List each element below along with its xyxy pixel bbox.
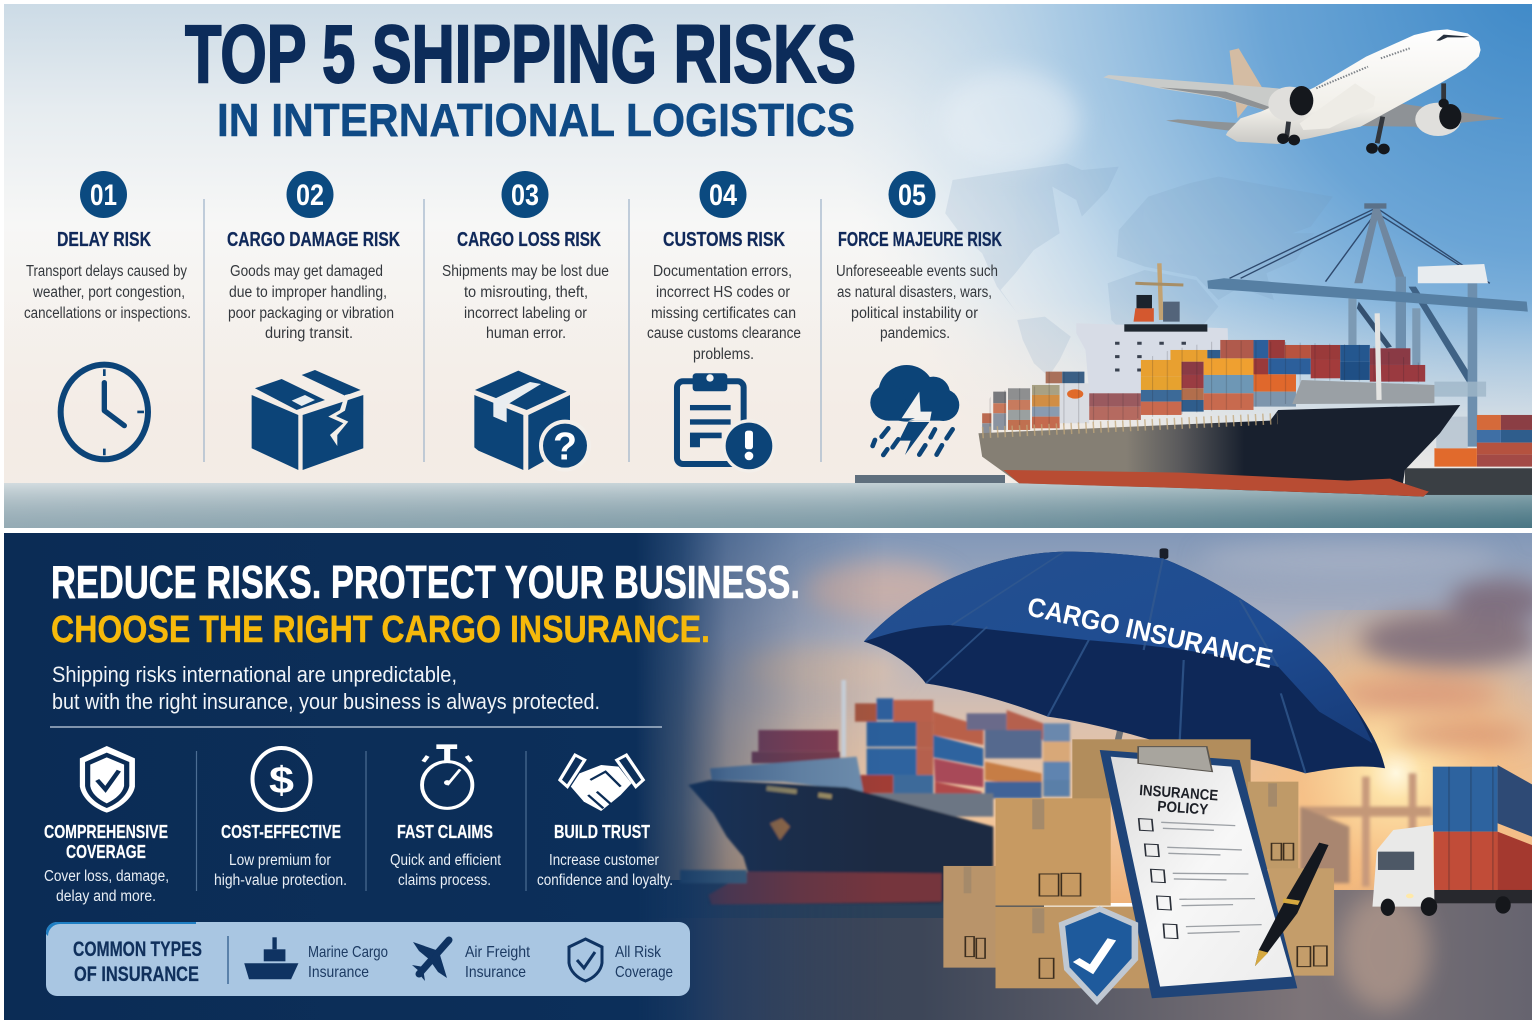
description: build trust: Increase customer — [549, 852, 659, 869]
heading: cargo damage risk: CARGO DAMAGE RISK — [227, 229, 400, 251]
description: fast claims — [390, 852, 502, 889]
heading: comprehensive coverage: COMPREHENSIVE — [44, 822, 168, 842]
truck with containers — [1372, 765, 1536, 916]
bar heading: OF INSURANCE — [74, 963, 199, 986]
description: customs risk — [647, 263, 801, 363]
headline — [51, 556, 800, 651]
item: air freight insurance — [412, 940, 530, 981]
description: customs risk: missing certificates can — [651, 305, 796, 322]
navy gradient overlay — [4, 533, 924, 1020]
description: cargo loss risk: Shipments may be lost due — [442, 263, 609, 280]
common types of insurance bar — [46, 922, 690, 996]
distant shoreline — [855, 475, 1005, 483]
icon: dollar coin — [252, 748, 310, 810]
port crane — [1207, 203, 1528, 447]
heading: comprehensive coverage — [44, 822, 168, 862]
icon: shield check — [80, 746, 135, 813]
subheading: but with the right insurance, your business is always protected. — [52, 689, 600, 714]
icon: dollar coin: $ — [269, 760, 294, 802]
title: TOP 5 SHIPPING RISKS — [185, 9, 856, 100]
description: delay risk: weather, port congestion, — [32, 284, 185, 301]
heading: force majeure risk: FORCE MAJEURE RISK — [838, 229, 1002, 251]
bar heading: COMMON TYPES — [73, 938, 202, 961]
heading: cargo loss risk: CARGO LOSS RISK — [457, 229, 601, 251]
heading: build trust: BUILD TRUST — [554, 822, 650, 842]
description: cargo damage risk: Goods may get damaged — [230, 263, 383, 280]
description: cost-effective — [214, 852, 347, 889]
heading: delay risk: DELAY RISK — [57, 229, 151, 251]
number badge 04 — [700, 171, 746, 218]
sea — [4, 483, 1532, 528]
number badge 01 — [80, 171, 127, 218]
description: cargo damage risk: poor packaging or vibration — [228, 305, 394, 322]
description: cargo loss risk: human error. — [486, 325, 566, 342]
item: marine cargo insurance — [244, 937, 388, 981]
description: fast claims: claims process. — [398, 872, 491, 889]
number badge 02: 02 — [296, 179, 324, 212]
description: customs risk: problems. — [693, 346, 754, 363]
benefit: fast claims — [390, 747, 502, 889]
icon: clipboard with alert — [677, 373, 776, 473]
icon: lost box with question mark: ? — [553, 424, 577, 468]
icon: damaged box — [252, 370, 363, 470]
risk 02: cargo damage — [227, 171, 400, 470]
description: comprehensive coverage — [44, 868, 169, 905]
umbrella canopy and pole — [864, 548, 1385, 773]
subheading: Shipping risks international are unpredictable, — [52, 662, 457, 687]
description: force majeure risk — [836, 263, 998, 342]
ship superstructure — [1076, 263, 1230, 393]
icon: clock — [61, 365, 148, 459]
description: cost-effective: Low premium for — [229, 852, 331, 869]
item: air freight insurance: Air Freight — [465, 944, 530, 961]
number badge 04: 04 — [709, 179, 737, 212]
description: customs risk: incorrect HS codes or — [656, 284, 790, 301]
description: cargo damage risk: due to improper handling, — [229, 284, 387, 301]
description: fast claims: Quick and efficient — [390, 852, 502, 869]
title — [184, 24, 854, 137]
description: build trust: confidence and loyalty. — [537, 872, 673, 889]
description: customs risk: Documentation errors, — [653, 263, 792, 280]
description: customs risk: cause customs clearance — [647, 325, 801, 342]
bar heading — [73, 938, 202, 986]
icon: stopwatch — [422, 747, 472, 808]
description: cargo loss risk — [442, 263, 609, 342]
benefit: comprehensive coverage — [44, 746, 169, 905]
description: build trust — [537, 852, 673, 889]
description: comprehensive coverage: delay and more. — [56, 888, 156, 905]
number badge 03 — [502, 171, 548, 218]
subheading — [52, 662, 600, 714]
heading: fast claims: FAST CLAIMS — [397, 822, 493, 842]
blurred harbour and crane — [1300, 773, 1432, 887]
item: air freight insurance: Insurance — [465, 964, 526, 981]
heading: customs risk: CUSTOMS RISK — [663, 229, 785, 251]
airplane — [1103, 29, 1505, 154]
world map watermark — [946, 164, 1225, 374]
description: force majeure risk: pandemics. — [880, 325, 950, 342]
clipboard heading — [1139, 782, 1219, 819]
panel: top shipping risks — [4, 4, 1536, 528]
description: force majeure risk: as natural disasters, wars, — [837, 284, 992, 301]
panel: cargo insurance — [4, 533, 1536, 1020]
container ship and port crane — [978, 203, 1536, 497]
number badge 03: 03 — [511, 179, 539, 212]
fountain pen — [1255, 843, 1329, 966]
blurred background ship — [680, 680, 1070, 905]
headline: CHOOSE THE RIGHT CARGO INSURANCE. — [51, 609, 710, 651]
ship hull — [978, 405, 1460, 497]
description: cargo damage risk — [228, 263, 394, 342]
risk 01: delay — [24, 171, 191, 459]
protection shield — [1059, 906, 1138, 1005]
item: all risk coverage: Coverage — [615, 964, 673, 981]
clipboard heading: INSURANCE — [1139, 782, 1219, 805]
ship antifouling — [1004, 470, 1429, 497]
description: cargo loss risk: incorrect labeling or — [464, 305, 587, 322]
column divider lines — [204, 199, 821, 462]
description: cost-effective: high-value protection. — [214, 872, 347, 889]
item: marine cargo insurance: Marine Cargo — [308, 944, 388, 961]
insurance policy clipboard — [1100, 747, 1297, 998]
benefit: cost-effective — [214, 748, 347, 889]
icon: storm cloud — [870, 365, 959, 455]
stacked containers — [982, 313, 1434, 433]
description: comprehensive coverage: Cover loss, damage, — [44, 868, 169, 885]
sunset clouds — [740, 542, 1536, 745]
item: marine cargo insurance: Insurance — [308, 964, 369, 981]
right quay containers — [1405, 415, 1536, 495]
heading: comprehensive coverage: COVERAGE — [66, 842, 146, 862]
description: cargo damage risk: during transit. — [265, 325, 353, 342]
heading: cost-effective: COST-EFFECTIVE — [221, 822, 341, 842]
number badge 02 — [286, 171, 334, 218]
number badge 05: 05 — [898, 179, 926, 212]
water and quay ground — [4, 880, 1532, 1020]
clipboard heading: POLICY — [1157, 798, 1209, 819]
description: force majeure risk: Unforeseeable events such — [836, 263, 998, 280]
description: delay risk — [24, 263, 191, 322]
risk 04: customs — [647, 171, 801, 473]
description: delay risk: Transport delays caused by — [26, 263, 187, 280]
risk 03: cargo loss — [442, 171, 609, 472]
title: IN INTERNATIONAL LOGISTICS — [217, 94, 855, 146]
cardboard boxes — [943, 739, 1334, 988]
headline: REDUCE RISKS. PROTECT YOUR BUSINESS. — [51, 556, 800, 608]
risk 05: force majeure — [836, 171, 1002, 455]
item: all risk coverage — [569, 939, 673, 981]
umbrella label: CARGO INSURANCE — [1025, 592, 1275, 674]
number badge 05 — [888, 171, 936, 218]
benefit: build trust — [537, 755, 673, 889]
icon: handshake — [560, 755, 643, 811]
description: delay risk: cancellations or inspections. — [24, 305, 191, 322]
number badge 01: 01 — [90, 179, 117, 212]
icon: lost box with question mark — [474, 371, 591, 472]
description: force majeure risk: political instability or — [851, 305, 978, 322]
item: all risk coverage: All Risk — [615, 944, 662, 961]
description: cargo loss risk: to misrouting, theft, — [464, 284, 588, 301]
